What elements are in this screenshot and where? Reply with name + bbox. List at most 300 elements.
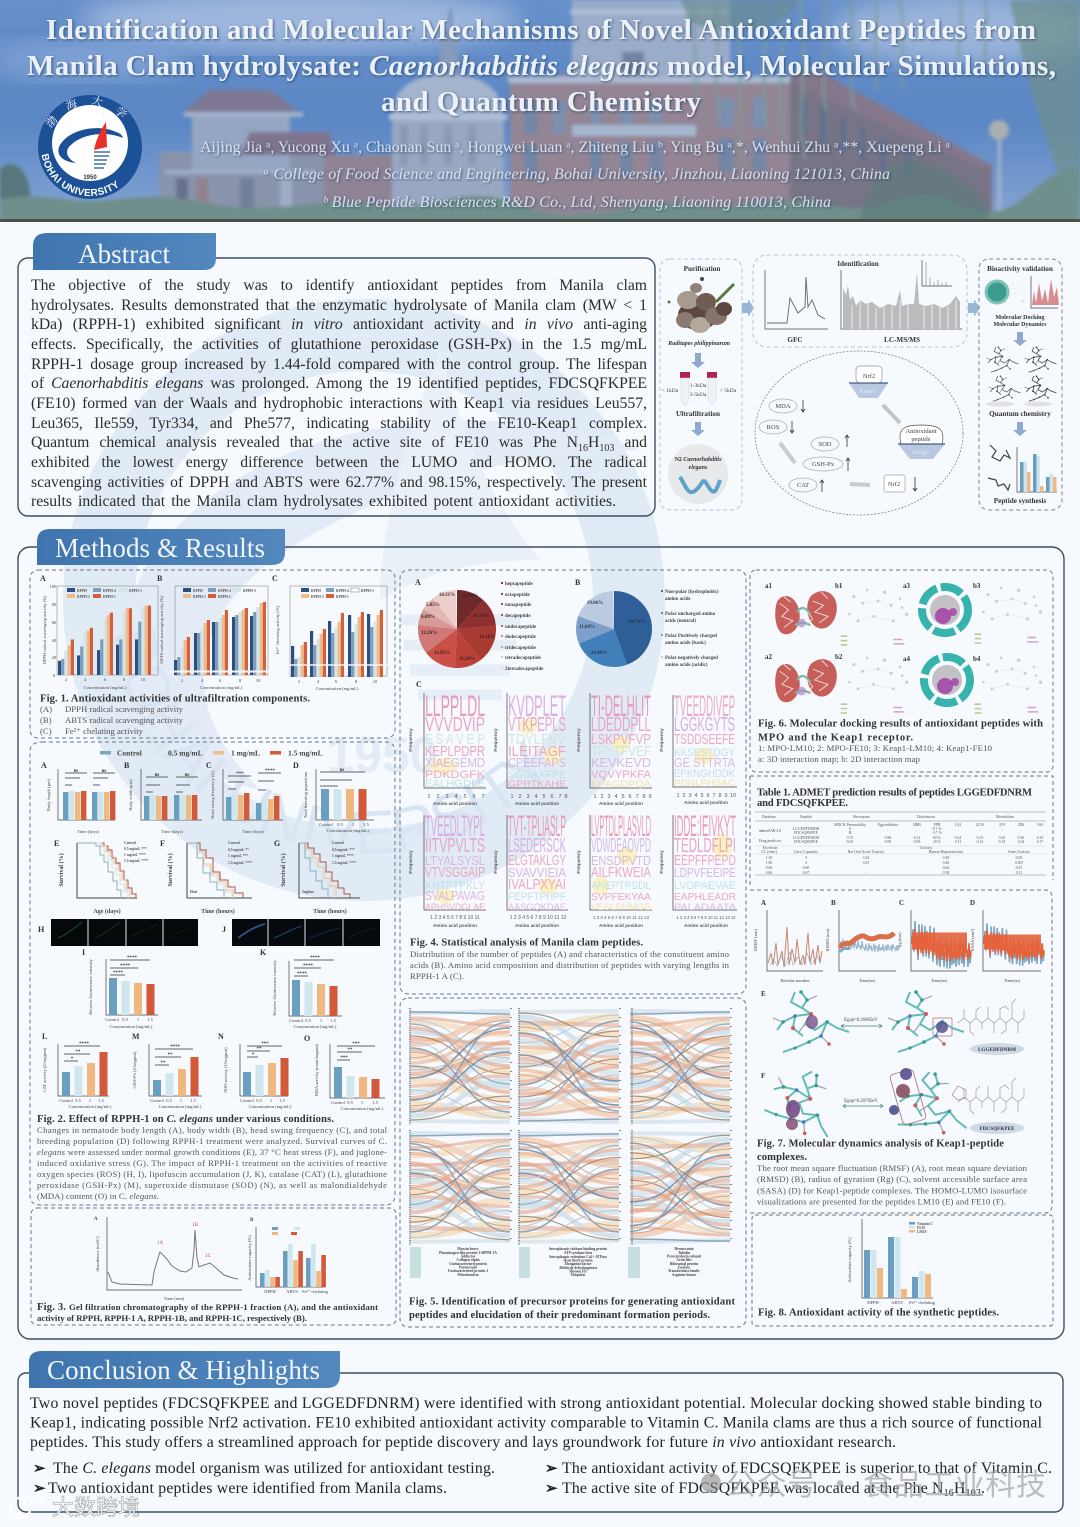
panel: Fig. 1 antioxidant activities: B [157, 574, 163, 583]
chart: Fe2+ chelating bars: RPPH-3 [361, 589, 374, 593]
chart: sequence logo 13-mer: AILFKWEIA [591, 864, 651, 881]
list: highlights left: Two antioxidant peptides were identified from Manila clams. [48, 1480, 447, 1497]
chart: sequence logo 8-mer: CPEEFAPS [508, 755, 566, 770]
chart: sequence logo 12-mer: IVALPXYAI [508, 876, 566, 893]
panel: Fig. 4 peptide statistics: TVT-TPLIASLP [508, 810, 566, 843]
images: H ROS fluorescence: H [38, 925, 45, 934]
image: a3 [922, 587, 968, 633]
logo: Bohai University seal [38, 95, 142, 199]
legend: amino acid classes: acids (neutral) [665, 619, 696, 624]
panel: Fig. 4 peptide statistics: KVDPLET [508, 690, 566, 723]
chart: I ROS intensity: 0.5 [122, 1017, 129, 1022]
chart: Fe2+ chelating bars: 10 [373, 679, 378, 684]
legend: amino acid classes [661, 590, 719, 668]
chart: sequence logo 7-mer [408, 690, 486, 806]
pie labels A: 6.69% [421, 615, 435, 620]
chart: sequence logo 14-mer [659, 810, 737, 928]
list: highlights right: ➢ [545, 1460, 558, 1477]
panel E: LM10 HOMO-LUMO [761, 990, 1024, 1055]
chart: sequence logo 11-mer: APHSVDGLAE [425, 902, 485, 912]
chart: F survival heat: 1.5 mg/mL **** [228, 861, 253, 865]
chart: F survival heat: F [160, 839, 165, 848]
chart: A body length: ns [74, 769, 78, 774]
pie labels A: 11.98% [462, 594, 478, 599]
caption: Fig. 2: (MDA) content (O) in C. elegans. [37, 1191, 159, 1201]
caption: Fig. 6 [758, 718, 1043, 764]
legend: concentration groups: 1 mg/mL [231, 748, 260, 758]
logo: Bohai University seal: BOHAI UNIVERSITY [42, 154, 118, 196]
chart: sequence logo 13-mer: VESLPHMGE [591, 902, 651, 912]
chart: fraction activity [247, 1218, 329, 1294]
chart: sequence logo 13-mer [576, 810, 652, 928]
table rows: Ames Toxicity [1008, 850, 1030, 854]
arrow [691, 422, 705, 436]
chart: ABTS bars: RPPH-4 [218, 589, 231, 593]
chart: sequence logo 14-mer: LDPVFEEIPE [674, 865, 736, 880]
chart: chromatography [94, 1217, 242, 1301]
panel F: FE10 HOMO-LUMO [757, 1056, 1024, 1152]
chart: ABTS bars: RPPH-2 [193, 595, 206, 599]
chart: N SOD: * [252, 1053, 255, 1058]
table rows: Absorption [852, 815, 870, 819]
pathway ellipse: Keap1 [860, 388, 876, 395]
chart: O MDA: O [304, 1034, 310, 1043]
chart: O MDA: 0.5 [347, 1100, 354, 1105]
caption: Fig. 3 [37, 1302, 378, 1323]
chart: Fe2+ chelating bars: 4 [317, 679, 320, 684]
legend: peptide length: nonapeptide [505, 603, 532, 608]
list: highlights right: ➢ [545, 1480, 558, 1497]
chart: G survival juglone: 1.5 mg/mL **** [332, 861, 357, 865]
chart: D SASA [970, 899, 1044, 983]
chart: sequence logo 7-mer: 1 [427, 794, 431, 800]
chart: sequence logo 10-mer: 6 [706, 793, 710, 799]
chart: sequence logo 13-mer: ANEPTPSDL [591, 880, 651, 892]
table rows: Distribution [917, 815, 935, 819]
alluvial legends: Peroxiredoxin subunit [667, 1254, 702, 1258]
panel: Fig. 4 peptide statistics: C [416, 680, 422, 689]
icon: clams [668, 277, 734, 333]
chart: alluvial 5 [519, 1133, 619, 1242]
chart: O MDA: *** [340, 1056, 348, 1061]
chart: N SOD: 1.5 [279, 1098, 286, 1103]
chart: M GSH-Px: 1 [180, 1098, 182, 1103]
panel: Fig. 4 peptide statistics: TVEEDLTYPL [425, 810, 485, 843]
chart: fraction activity: ABTS [286, 1289, 298, 1294]
chart: DPPH bars: Concentration (mg/mL) [84, 685, 127, 690]
pie labels B [579, 601, 645, 656]
chart: L CAT: Concentration (mg/mL) [69, 1104, 112, 1109]
table rows: 3 [805, 856, 807, 860]
chart: O MDA: *** [352, 1042, 360, 1047]
chart: L CAT: Control [59, 1098, 74, 1103]
table rows: - [1001, 829, 1003, 833]
chart: O MDA: MDA activity (nmol/mgprot) [314, 1043, 319, 1096]
pie labels A: 10.31% [439, 593, 455, 598]
caption: Fig. 7: (SASA) (D) for Keap1-peptide complexes. The HOMO-LUMO isosurface [757, 1186, 1027, 1196]
purification column: < 1kDa [662, 388, 679, 394]
alluvial legends: Adductor [461, 1254, 476, 1258]
heading: Conclusion & Highlights: Conclusion & Highlights [47, 1355, 320, 1385]
chart: sequence logo 13-mer: 1 2 3 4 5 6 7 8 9 10 11 12 13 [593, 915, 649, 920]
chart: ABTS bars: RPPH [193, 589, 203, 593]
chart: sequence logo 10-mer: Amino acid position [684, 800, 728, 805]
table rows: Excretion [763, 846, 777, 850]
chart: O MDA [304, 1034, 385, 1111]
chart: sequence logo 11-mer: Frequency [408, 850, 413, 874]
chart: Fe2+ chelating bars: 8 [355, 679, 358, 684]
chart: A RMSF [753, 899, 823, 983]
chart: M GSH-Px: Concentration (mg/mL) [159, 1104, 202, 1109]
chart: sequence logo 8-mer: GPRTKAHE [508, 779, 566, 789]
caption: Fig. 2: oxygen species (ROS) (H, I), lipofuscin accumulation (J, K), catalase (CAT) (L), glutathione [37, 1169, 387, 1179]
alluvial legends: Aldehyde dehydrogenase [559, 1266, 598, 1270]
chart: L CAT: **** [79, 1042, 90, 1047]
table rows: 3.33 [863, 856, 869, 860]
chart: I ROS intensity: Relative fluorescence intensity [88, 959, 93, 1015]
purification column: 3-5kDa [690, 392, 707, 398]
caption: Fig. 4: Distribution of the number of peptides (A) and characteristics of the constituent amino [410, 949, 730, 959]
chart: C head swing: Time (days) [242, 829, 264, 834]
chart: sequence logo 7-mer: 4 [454, 794, 458, 800]
alluvial legends: Sarcoplasmic calcium-binding protein [549, 1247, 607, 1251]
chart: sequence logo 9-mer: LDEDDPLL [591, 714, 651, 736]
chart: DPPH bars: 60 [52, 620, 57, 625]
chart: sequence logo 12-mer: FEPFTPHPF [508, 891, 566, 903]
list: highlights right: H [954, 1480, 965, 1497]
chart: Fe2+ chelating bars: Fe²⁺ chelating activity (%) [275, 605, 280, 654]
table rows: - [1020, 829, 1022, 833]
legend: amino acid classes: amino acids [665, 597, 690, 602]
chart: sequence logo 9-mer: 3 [607, 794, 611, 800]
chart: N SOD: Control [240, 1098, 255, 1103]
panel: Fig. 4 peptide statistics: LLPPLDL [425, 690, 485, 723]
chart: DPPH bars: 6 [104, 677, 107, 682]
chart: K lipofuscin intensity: Relative fluorescence intensity [272, 960, 277, 1016]
chart: E survival: Age (days) [93, 908, 121, 915]
chart: L CAT: 0.5 [75, 1098, 82, 1103]
chart: sequence logo 11-mer: Amino acid position [433, 923, 477, 928]
panel: Fig. 4 peptide statistics: LSEDERSCK [508, 835, 566, 857]
panel F: FE10 HOMO-LUMO: F [761, 1072, 765, 1080]
chart: synthetic peptide activity: LM10 [917, 1230, 927, 1234]
alluvial legends: Tubulin [678, 1251, 690, 1255]
chart: M GSH-Px: ** [160, 1061, 166, 1066]
chart: DPPH bars: 80 [52, 602, 57, 607]
chart: sequence logo 8-mer: 6 [550, 794, 554, 800]
chart: DPPH bars: 8 [123, 677, 126, 682]
chart: DPPH bars: RPPH [77, 589, 87, 593]
table rows: 0.11 [955, 840, 961, 844]
authors and affiliations: Aijing Jia ᵃ, Yucong Xu ᵃ, Chaonan Sun ᵃ, Hongwei Luan ᵃ, Zhiteng Liu ᵇ, Ying Bu ᵃ,*, Wenhui Zhu ᵃ,**, Xuepeng Li ᵃ [200, 139, 951, 156]
authors and affiliations: ᵃ College of Food Science and Engineering, Bohai University, Jinzhou, Liaoning 121013, China [263, 166, 890, 183]
panel E: LM10 HOMO-LUMO: Egap=0.26885eV [844, 1018, 878, 1023]
chart: sequence logo 8-mer: 5 [542, 794, 546, 800]
chart: synthetic peptide activity: DPPH [867, 1300, 879, 1305]
text: abstract body: RPPH-1 dosage group increased by 1.44-fold compared with the control group. The lifespan [31, 356, 647, 373]
legend: peptide length: undecapeptide [505, 625, 537, 630]
chart: alluvial 2 [519, 1011, 619, 1122]
table rows: 0.03 [1016, 856, 1022, 860]
table rows: 0.38 [943, 871, 949, 875]
chart: ABTS bars: 10 [256, 678, 261, 683]
labels: docking subpanels: b2 [835, 653, 843, 661]
purification column: Ruditapes philippinarum [667, 341, 730, 347]
chart: N SOD: 0.5 [256, 1098, 263, 1103]
chart: Fe2+ chelating bars: RPPH [311, 589, 321, 593]
chart: G survival juglone: Time (hours) [313, 908, 347, 915]
caption: Fig. 2: induced oxidative stress (G). The impact of RPPH-1 treatment on the activities of reactive [37, 1158, 387, 1168]
panel: Fig. 3 gel filtration [31, 1208, 396, 1325]
table rows: BBB [913, 823, 921, 827]
table rows: 0.60 [803, 866, 809, 870]
chart: C Rg: Rg (nm) [897, 932, 902, 948]
caption: Fig. 8: Fig. 8. Antioxidant activity of the synthetic peptides. [758, 1308, 999, 1318]
pathway ellipse: Nrf2 [888, 481, 900, 488]
chart: fraction activity: Antioxidant capacity (%) [247, 1235, 252, 1281]
chart: sequence logo 9-mer: KEVKEVD [591, 755, 651, 770]
caption: Fig. 7: (RMSD) (B), radius of gyration (Rg) (C), solvent accessible surface area [757, 1174, 1027, 1184]
chart: E survival [54, 839, 149, 915]
chart: sequence logo 9-mer: Frequency [576, 728, 581, 752]
legend: peptide length: 2tetradecapeptide [505, 667, 544, 672]
chart: sequence logo 12-mer: Frequency [493, 850, 498, 874]
table rows: S [849, 827, 851, 831]
table rows: - [957, 829, 959, 833]
chart: sequence logo 11-mer: 1 2 3 4 5 6 7 8 9 10 11 [430, 915, 480, 921]
pie labels B: 11.84% [579, 625, 595, 630]
chart: sequence logo 8-mer: 2 [518, 794, 522, 800]
panel: Fig. 1 antioxidant activities [30, 570, 395, 738]
chart: ABTS bars: 2 [181, 678, 183, 683]
heading: Abstract [33, 233, 216, 270]
text: conclusion paragraph: Keap1, indicating possible Nrf2 activation. FE10 exhibited antioxidant activity comparable to Vitamin C. Manila clams are thus a rich source of functional [30, 1414, 1043, 1432]
image: b4 [975, 657, 1042, 713]
table rows: MDCK Permeability [834, 823, 866, 827]
chart: sequence logo 10-mer [659, 690, 737, 805]
chart: synthetic peptide activity: Fe²⁺ chelating [909, 1300, 936, 1305]
chart: sequence logo 13-mer: Frequency [576, 850, 581, 874]
chart: sequence logo 7-mer: 7 [481, 794, 485, 800]
caption: Fig. 2: peroxidase (GSH-Px) (M), superoxide dismutase (SOD) (N), as well as malondialdehyde [37, 1180, 387, 1190]
table rows: 0.30 [1018, 836, 1024, 840]
image: a4 [924, 657, 970, 703]
legend: amino acid classes: Non-polar (hydrophobic) [665, 590, 719, 595]
bioactivity validation column: Quantum chemistry [989, 410, 1051, 418]
chart: O MDA: Control [331, 1100, 346, 1105]
chart: A RMSF: A [761, 899, 766, 907]
pathway ellipse: Keap1 [913, 449, 929, 456]
chart: sequence logo 9-mer: 2 [600, 794, 604, 800]
chart: G survival juglone [274, 839, 360, 915]
chart: LC-MS/MS: LC-MS/MS [884, 336, 920, 344]
legend: concentration groups: 1.5 mg/mL [288, 748, 323, 758]
table rows: - [887, 829, 889, 833]
chart: D total population: 1 [352, 822, 354, 827]
chart: M GSH-Px: 1.5 [190, 1098, 197, 1103]
chart: peptide length pie [438, 610, 476, 648]
table rows: Pgp-inhibitor [878, 823, 899, 827]
chart: DPPH bars: 2 [65, 677, 67, 682]
table rows: Rat Oral Acute Toxicity [848, 850, 884, 854]
alluvial legends: Actin-like [676, 1258, 692, 1262]
list: highlights right: The active site of FDCSQFKPEE was located at the Phe N [562, 1480, 943, 1497]
chart: GFC: GFC [787, 336, 803, 344]
chart: M GSH-Px: **** [170, 1045, 180, 1050]
chart: Fe2+ chelating bars: Concentration (mg/mL) [316, 686, 359, 691]
table rows: 0.24 [955, 836, 961, 840]
table rows: 0.40 [943, 861, 949, 865]
caption: Fig. 2: elegans were assessed under normal growth conditions (E), 37 °C heat stress (F), and juglone- [37, 1147, 387, 1157]
main graphics layer: IDDE:IEIVKYT [674, 810, 736, 843]
table rows: 3.81 [863, 861, 869, 865]
chart: N SOD: Concentration (mg/mL) [249, 1104, 292, 1109]
chart: sequence logo 7-mer: 5 [463, 794, 467, 800]
bioactivity validation column: Peptide synthesis [994, 497, 1046, 505]
list: highlights right: 16 [944, 1488, 954, 1499]
alluvial legends [410, 1247, 702, 1278]
table rows: 0.00 [766, 871, 772, 875]
text: conclusion paragraph: peptides. This study offers a streamlined approach for peptide discovery and lays groundwork for future in vivo antioxidant research. [30, 1434, 896, 1451]
table rows: 0.15 [1037, 836, 1043, 840]
text: abstract body: hydrolysates. Results demonstrated that the enzymatic hydrolysate of Manila clam (MW < 1 [31, 297, 647, 314]
chart: sequence logo 9-mer: 1 [593, 794, 597, 800]
chart: C head swing: **** [265, 769, 276, 774]
bioactivity validation column: Molecular Dynamics [993, 322, 1047, 328]
title [27, 14, 1056, 118]
table rows: - [1039, 829, 1041, 833]
chart: sequence logo 12-mer: SVAVVIEIA [508, 865, 566, 880]
chart: I ROS intensity: **** [120, 964, 130, 969]
table rows: 0.25 [999, 836, 1005, 840]
chart: amino acid property pie [595, 610, 633, 648]
labels: docking subpanels: b3 [973, 582, 981, 590]
caption: Fig. 1: Fig. 1. Antioxidant activities of ultrafiltration components. [40, 694, 310, 704]
text: abstract body: exhibited the lowest energy difference between the LUMO and HOMO. The radical [31, 454, 647, 471]
text: abstract body: effects. Specifically, the activities of glutathione peroxidase (GSH-Px) in the 1.5 mg/mL [31, 336, 647, 353]
chart: I ROS intensity: **** [127, 956, 138, 961]
chart: sequence logo 8-mer: 7 [558, 794, 562, 800]
chart: sequence logo 7-mer: 2 [436, 794, 440, 800]
alluvial legends: Uncharacterized protein 2 [448, 1269, 488, 1273]
chart: E survival: Control [124, 841, 136, 845]
chart: M GSH-Px: GSH-Px (U/mgprot) [132, 1051, 137, 1088]
alluvial legends: Hemocyanin [674, 1247, 694, 1251]
bioactivity validation column: Molecular Docking [995, 315, 1045, 321]
table rows: - [979, 829, 981, 833]
alluvial legends: Histone H3 [569, 1270, 587, 1274]
table rows: - [916, 829, 918, 833]
alluvial legends: Arginine kinase [672, 1273, 697, 1277]
table rows: 0.04 [943, 866, 949, 870]
panel: methods and results frame [18, 547, 1064, 1339]
table rows: 0.17 [1037, 840, 1043, 844]
chart: A body length: Time (days) [77, 829, 99, 834]
caption: Fig. 3: Fig. 3. Gel filtration chromatography of the RPPH-1 fraction (A), and the antioxidant [37, 1302, 378, 1313]
chart: B body width: Time (days) [161, 829, 183, 834]
table rows [755, 812, 1046, 875]
pathway ellipse: MDA [775, 403, 791, 410]
chart: sequence logo 7-mer: 6 [472, 794, 476, 800]
chart: Fe2+ chelating bars [275, 586, 388, 691]
alluvial legends: Paramyosin [459, 1266, 477, 1270]
pie labels A [421, 593, 495, 662]
list: highlights left [33, 1460, 495, 1497]
chart: sequence logo 14-mer: Amino acid position [684, 923, 728, 928]
table rows: 0.13 [977, 840, 983, 844]
chart: M GSH-Px: ** [168, 1053, 173, 1058]
chart: sequence logo 8-mer: 1 [510, 794, 514, 800]
table rows: FDCSQFKPEE [794, 831, 819, 835]
caption: Fig. 6: Fig. 6. Molecular docking results of antioxidant peptides with [758, 718, 1043, 730]
legend: concentration groups: 0.5 mg/mL [168, 748, 203, 758]
chart: ABTS bars [159, 586, 270, 690]
chart: E survival: 0.5 mg/mL *** [124, 847, 147, 851]
chart: sequence logo 7-mer: VVVDVIP [425, 714, 485, 736]
title: Identification and Molecular Mechanisms of Novel Antioxidant Peptides from [46, 14, 1036, 46]
chart: synthetic peptide activity: FE10 [917, 1226, 925, 1230]
chart: E survival: 1 mg/mL **** [124, 853, 146, 857]
icon: C. elegans worm: N2 Caenorhabditis [675, 457, 722, 463]
image: a2 [775, 659, 837, 702]
chart: B body width: ns [155, 773, 159, 778]
chart: D SASA: SASA (nm²) [970, 928, 975, 951]
chart: O MDA: 1 [361, 1100, 363, 1105]
chart: D SASA: Time(ns) [1004, 978, 1021, 983]
chart: sequence logo 7-mer: 3 [445, 794, 449, 800]
chart: alluvial 3 [630, 1011, 730, 1122]
chart: sequence logo 11-mer [408, 810, 486, 928]
caption: Fig. 2: Changes in nematode body length (A), body width (B), head swing frequency (C), and total [37, 1125, 388, 1135]
panel: Fig. 7 molecular dynamics [750, 890, 1052, 1213]
caption: Fig. 3: activity of RPPH, RPPH-1 A, RPPH-1B, and RPPH-1C, respectively (B). [37, 1313, 307, 1323]
chart: GFC [765, 270, 828, 344]
chart: N SOD [218, 1032, 292, 1109]
panel F: FE10 HOMO-LUMO: FDCSQFKPEE [980, 1126, 1015, 1132]
table rows: 0.34 [1018, 840, 1024, 844]
chart: sequence logo 7-mer: E S A V E P [425, 731, 485, 748]
chart: sequence logo 12-mer [493, 810, 568, 928]
pathway ellipse: Nrf2 [863, 373, 875, 380]
chart: LC-MS/MS [841, 260, 962, 344]
table rows: 0.007 [1015, 861, 1023, 865]
labels: docking subpanels: a1 [765, 582, 772, 590]
watermark: Dashujuke [10, 1490, 140, 1522]
alluvial legends: Uncharacterized protein [449, 1262, 487, 1266]
caption: Fig. 2: Fig. 2. Effect of RPPH-1 on C. elegans under various conditions. [37, 1114, 334, 1125]
caption: Fig. 7: visualizations are presented for the peptides LM10 (E) and FE10 (F). [757, 1196, 1006, 1206]
caption: Fig. 4: RPPH-1 A (C). [410, 971, 464, 981]
panel: Fig. 1 antioxidant activities: C [272, 574, 278, 583]
panel: Fig. 4 peptide statistics: TI-DELHLIT [591, 690, 651, 723]
pie labels B: 19.06% [587, 601, 603, 606]
chart: sequence logo 11-mer: VTVSGGAIP [425, 864, 485, 881]
chart: sequence logo 8-mer: 3 [526, 794, 530, 800]
table rows: - [865, 871, 867, 875]
chart: L CAT: 1 [89, 1098, 91, 1103]
background watermark: university seal: BOHAI UNIVERSITY [126, 628, 528, 829]
caption: Fig. 5: Fig. 5. Identification of precursor proteins for generating antioxidant [409, 1296, 735, 1308]
table rows: 8.1 % [933, 827, 942, 831]
chart: sequence logo 8-mer: Frequency [493, 728, 498, 752]
chart: K lipofuscin intensity: **** [297, 972, 308, 977]
list: highlights left: ➢ [33, 1460, 46, 1477]
chart: E survival: E [54, 839, 59, 848]
identification panel: Identification [837, 260, 879, 268]
alluvial legends: ATP synthase beta [564, 1251, 592, 1255]
chart: M GSH-Px [132, 1032, 202, 1109]
chart: DPPH bars: 10 [141, 677, 146, 682]
